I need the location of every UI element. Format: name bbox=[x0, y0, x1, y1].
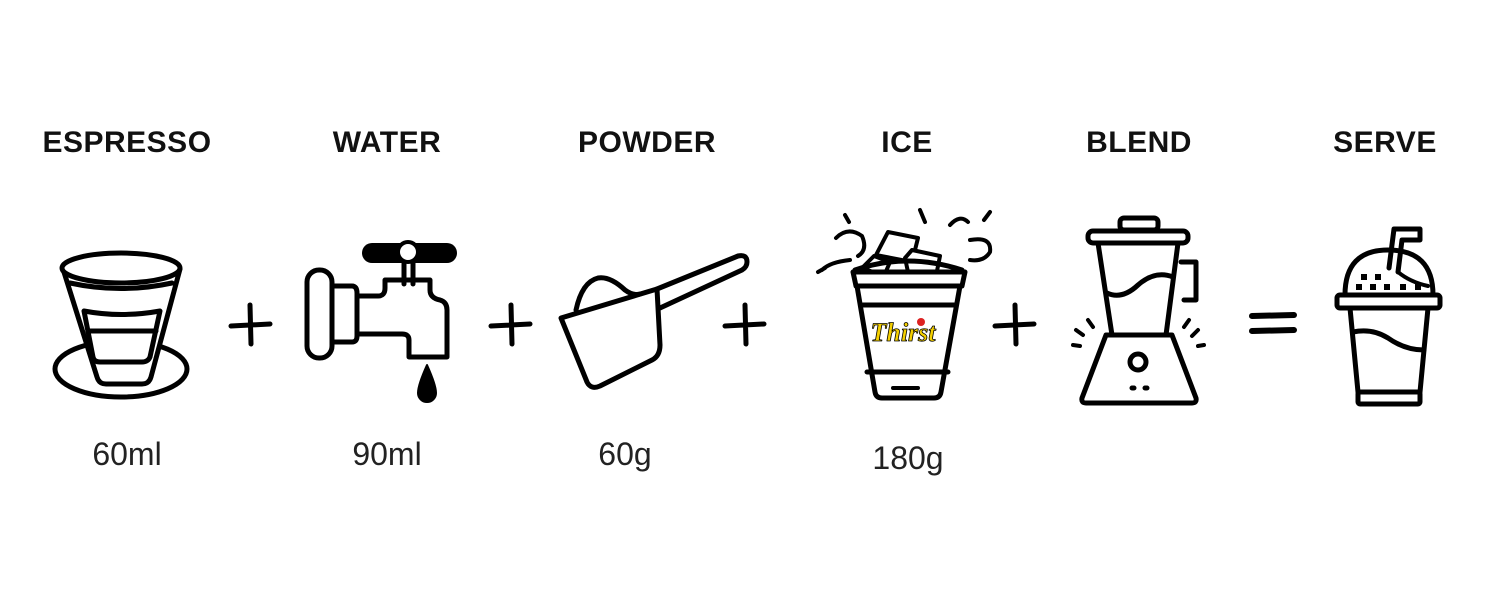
icon: blender bbox=[1073, 218, 1204, 403]
quantity: 180g: 180g bbox=[872, 440, 944, 476]
icon: ice cup bbox=[818, 210, 990, 398]
quantity: 60ml: 60ml bbox=[92, 436, 162, 472]
icon: faucet bbox=[307, 242, 457, 402]
plus 3 bbox=[725, 305, 764, 344]
plus 4 bbox=[995, 305, 1034, 344]
icon: ice cup: Thirst bbox=[870, 318, 936, 347]
equals bbox=[1252, 315, 1294, 331]
icon: frappe cup bbox=[1337, 229, 1440, 404]
quantity: 60g: 60g bbox=[598, 436, 652, 472]
heading: blend: BLEND bbox=[1086, 126, 1192, 159]
plus 1 bbox=[231, 305, 270, 344]
heading: water: WATER bbox=[333, 126, 441, 159]
quantity: 90ml: 90ml bbox=[352, 436, 422, 472]
heading: serve: SERVE bbox=[1333, 126, 1437, 159]
icon: espresso glass bbox=[55, 253, 187, 397]
icon: powder scoop bbox=[561, 256, 747, 387]
heading: espresso: ESPRESSO bbox=[42, 126, 212, 159]
heading: ice: ICE bbox=[881, 126, 933, 159]
plus 2 bbox=[491, 305, 530, 344]
heading: powder: POWDER bbox=[578, 126, 716, 159]
